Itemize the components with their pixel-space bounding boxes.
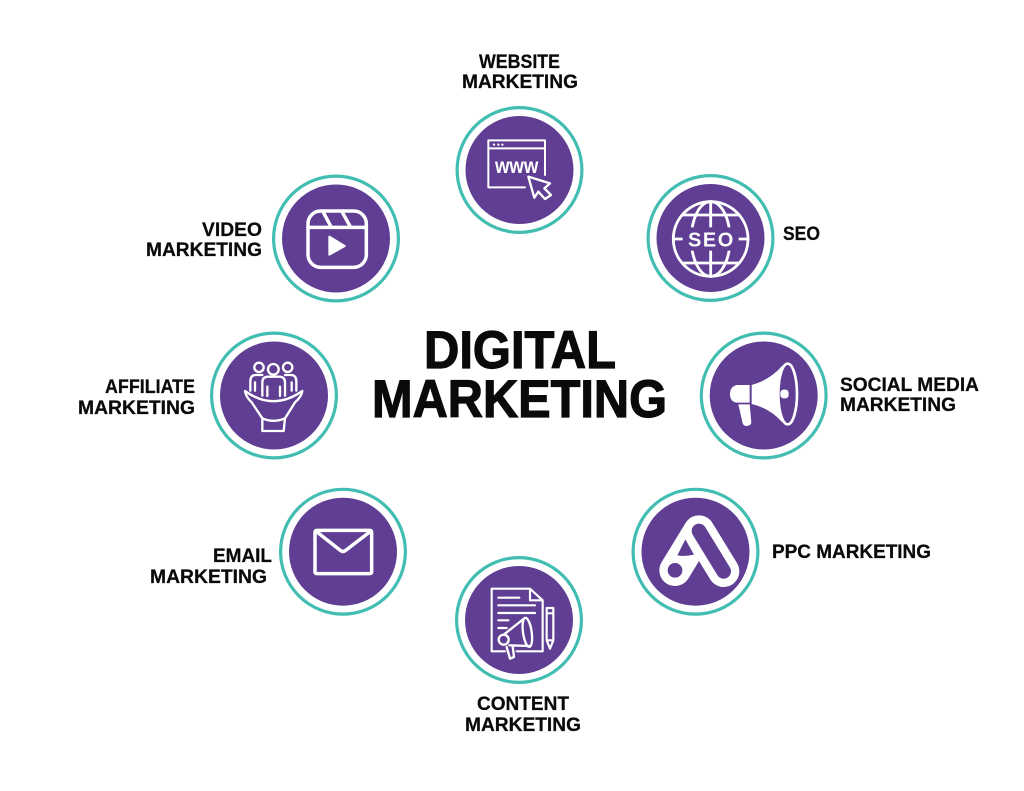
label: content marketing: MARKETING	[465, 715, 581, 736]
panel: ppc marketing	[633, 489, 931, 614]
title	[372, 321, 667, 429]
label: affiliate marketing: AFFILIATE	[105, 377, 195, 398]
title: MARKETING	[372, 370, 667, 429]
icon: people in funnel	[245, 363, 302, 431]
label: video marketing: VIDEO	[202, 220, 262, 241]
panel: video marketing	[146, 176, 398, 301]
icon: google ads logo	[668, 531, 724, 578]
label: email marketing: MARKETING	[150, 567, 267, 588]
label: website marketing: WEBSITE	[479, 52, 560, 73]
label: seo: SEO	[783, 224, 820, 245]
panel: seo	[648, 176, 820, 300]
label: social media marketing	[840, 375, 979, 416]
icon: video reel	[308, 211, 366, 267]
label: website marketing	[462, 52, 578, 93]
icon: globe with seo text: SEO	[688, 229, 733, 251]
icon: browser window with cursor: www	[494, 154, 539, 178]
icon: browser window with cursor	[488, 140, 551, 199]
label: content marketing	[465, 694, 581, 736]
label: affiliate marketing: MARKETING	[78, 398, 195, 419]
panel: email marketing	[150, 489, 405, 614]
icon: envelope	[315, 530, 372, 574]
label: email marketing	[150, 546, 272, 588]
panel: website marketing	[457, 52, 582, 232]
label: affiliate marketing	[78, 377, 195, 419]
label: social media marketing: MARKETING	[840, 395, 956, 416]
label: email marketing: EMAIL	[213, 546, 272, 567]
panel: affiliate marketing	[78, 333, 336, 458]
label: social media marketing: SOCIAL MEDIA	[840, 375, 979, 396]
icon: globe with seo text	[673, 202, 748, 276]
label: video marketing	[146, 220, 262, 261]
icon: document with megaphone and pencil	[492, 589, 553, 659]
title: DIGITAL	[424, 321, 616, 380]
icon: megaphone	[730, 364, 797, 426]
label: website marketing: MARKETING	[462, 72, 578, 93]
label: video marketing: MARKETING	[146, 240, 262, 261]
panel: social media marketing	[701, 333, 979, 458]
label: content marketing: CONTENT	[477, 694, 569, 715]
panel: content marketing	[457, 558, 581, 736]
label: ppc marketing: PPC MARKETING	[772, 542, 931, 563]
